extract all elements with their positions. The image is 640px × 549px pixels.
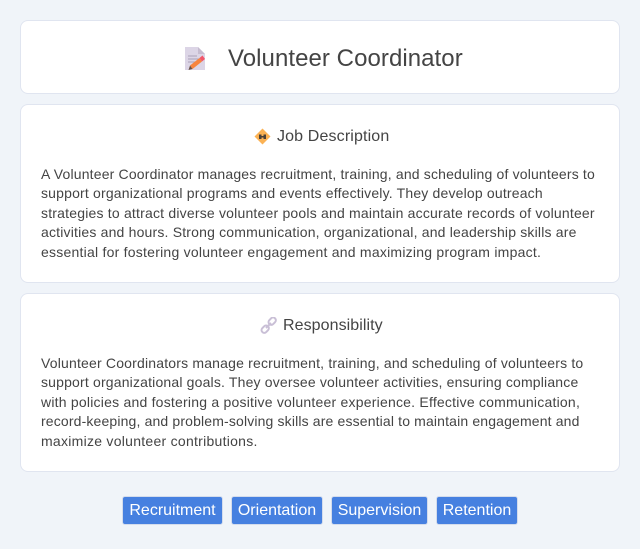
heading: responsibility: Responsibility [283,317,383,334]
tag: Orientation: Orientation [238,502,316,519]
panel: title card [20,20,620,94]
icon: orange diamond [254,128,270,144]
tag: Supervision [331,496,428,525]
tag: Recruitment [122,496,223,525]
text block: job description [41,166,595,260]
text block: responsibility: maximize volunteer contributions. [41,433,258,449]
tag: Recruitment: Recruitment [129,502,216,519]
icon: chain link [260,317,277,334]
text block: responsibility [41,355,583,449]
icon: document with pencil [185,47,205,70]
text block: job description: essential for fostering volunteer engagement and maximizing program impact. [41,244,541,260]
text block: responsibility: with policies and fostering a positive volunteer experience. Effective communication, [41,394,580,410]
tag: Supervision: Supervision [338,502,421,519]
tag: Retention [436,496,518,525]
heading: job description: Job Description [277,128,389,145]
panel: job description [20,104,620,283]
text block: job description: support organizational programs and events effectively. They develop outreach [41,185,543,201]
title: Volunteer Coordinator [228,45,463,72]
text block: job description: A Volunteer Coordinator manages recruitment, training, and scheduling of volunteers to [41,166,595,182]
text block: job description: strategies to attract diverse volunteer pools and maintain accurate records of volunteer [41,205,595,221]
panel: responsibility [20,293,620,472]
tag: Retention: Retention [443,502,511,519]
text block: responsibility: Volunteer Coordinators manage recruitment, training, and scheduling of volunteers to [41,355,583,371]
text block: responsibility: record-keeping, and problem-solving skills are essential to maintain engagement and [41,413,580,429]
tag: Orientation [231,496,323,525]
text block: job description: activities and hours. Strong communication, organizational, and leadership skills are [41,224,577,240]
text block: responsibility: support organizational goals. They oversee volunteer activities, ensuring compliance [41,374,578,390]
